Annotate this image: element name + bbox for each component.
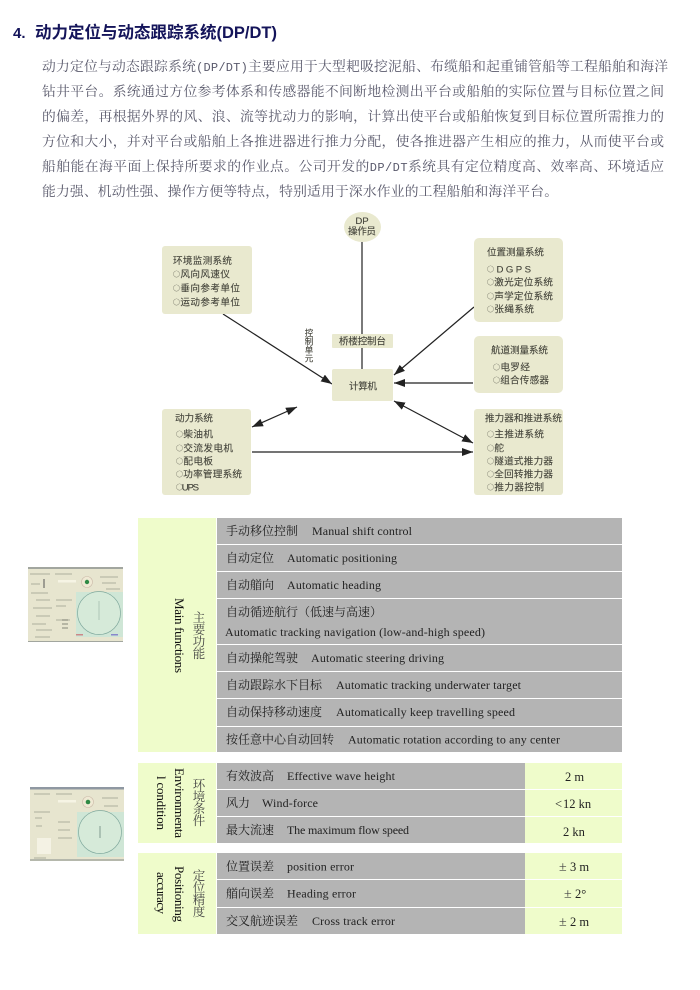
row: maximum flow speed [217, 817, 622, 843]
row: automatic steering driving [217, 645, 622, 671]
row: automatic tracking underwater target [217, 672, 622, 698]
panel: position measurement system: 位置测量系统 [487, 246, 544, 258]
row: automatic positioning: Automatic positioning [287, 551, 397, 565]
row: position error: 3 m [570, 860, 589, 874]
row: automatically keep travelling speed: 自动保持移动速度 [226, 704, 322, 719]
row: effective wave height: Effective wave height [287, 769, 396, 783]
table: environmental condition [138, 763, 622, 843]
row: automatic rotation around any center: Automatic rotation according to any center [348, 732, 560, 746]
panel: thruster and propulsion system: ○全回转推力器 [487, 468, 553, 480]
row: heading error: 艏向误差 [226, 886, 274, 900]
row: maximum flow speed: 最大流速 [226, 822, 274, 837]
row: heading error: Heading error [287, 886, 356, 900]
row: automatic heading: 自动艏向 [226, 577, 274, 592]
panel: thruster and propulsion system: ○主推进系统 [487, 428, 544, 440]
row: heading error: ± [564, 887, 572, 902]
row: automatic tracking navigation: 自动循迹航行（低速与高速） [226, 604, 382, 619]
side label: environmental condition: l condition [154, 776, 169, 830]
side label: positioning accuracy: 精 [193, 892, 206, 907]
screenshot: DP control screen 1 [28, 567, 123, 642]
arrow: environment monitoring to computer [223, 314, 332, 384]
row: cross track error [217, 908, 622, 934]
side label: main functions: 功 [193, 634, 205, 649]
panel: navigation measurement system: ○组合传感器 [493, 374, 549, 386]
row: position error [217, 853, 622, 879]
panel: position measurement system [474, 238, 563, 322]
side label: environmental condition: 环 [193, 778, 206, 792]
panel: power system [162, 409, 251, 495]
row: maximum flow speed: The maximum flow speed [287, 823, 409, 837]
panel: environment monitoring system [162, 246, 252, 314]
row: automatic tracking underwater target: Automatic tracking underwater target [336, 678, 522, 692]
panel: thruster and propulsion system: ○舵 [487, 442, 504, 454]
table: main functions [138, 518, 622, 752]
row: wind force: 风力 [226, 795, 250, 810]
row: wind force: Wind-force [262, 796, 318, 810]
row: automatic rotation around any center [217, 727, 622, 752]
row: wind force [217, 790, 622, 816]
side label: main functions: 能 [193, 646, 205, 661]
side label: environmental condition: 条 [193, 802, 206, 816]
panel: power system: ○功率管理系统 [176, 468, 242, 480]
row: wind force: < [555, 797, 562, 811]
row: cross track error: 交叉航迹误差 [226, 913, 298, 928]
label: control unit: 控 [305, 328, 314, 338]
panel: power system: 动力系统 [175, 412, 213, 424]
arrow: power system double arrow [252, 407, 297, 427]
intro paragraph [42, 58, 668, 200]
intro paragraph: 钻井平台。系统通过方位参考体系和传感器能不间断地检测出平台或船舶的实际位置与目标位置之间 [42, 83, 664, 99]
intro paragraph: 船舶能在海平面上保持所要求的作业点。公司开发的DP/DT系统具有定位精度高、效率高、环境适应 [42, 158, 664, 175]
row: position error: ± [559, 860, 567, 875]
side label: main functions: 要 [193, 623, 206, 637]
node: computer [332, 369, 393, 401]
table: positioning accuracy [138, 853, 622, 934]
panel: power system: ○UPS [176, 482, 199, 494]
row: automatic positioning: 自动定位 [226, 550, 274, 565]
intro paragraph: 方位和大小，并对平台或船舶上各推进器进行推力分配，使各推进器产生相应的推力，从而使平台或 [42, 133, 664, 150]
row: automatic heading: Automatic heading [287, 578, 381, 592]
label: control unit: 单 [305, 345, 314, 355]
row: position error: 位置误差 [226, 858, 274, 874]
row: manual shift control [217, 518, 622, 544]
panel: environment monitoring system: ○风向风速仪 [173, 268, 230, 280]
arrow: DP operator to bridge console and computer [361, 242, 363, 369]
panel: position measurement system: ○声学定位系统 [487, 290, 553, 302]
side label: positioning accuracy: 定 [193, 869, 206, 883]
row: automatic steering driving: Automatic steering driving [311, 651, 444, 665]
row: effective wave height: 2 m [565, 770, 584, 784]
title: 4. [13, 25, 26, 42]
label: control unit: 制 [305, 336, 313, 346]
row: cross track error: Cross track error [312, 914, 395, 928]
side label: main functions: Main functions [172, 598, 187, 673]
row: automatic positioning [217, 545, 622, 571]
row: automatic tracking underwater target: 自动跟踪水下目标 [226, 677, 323, 692]
node: DP operator [344, 212, 381, 242]
node: bridge console: 桥楼控制台 [339, 336, 386, 348]
panel: thruster and propulsion system [474, 409, 563, 495]
intro paragraph: 动力定位与动态跟踪系统(DP/DT)主要应用于大型耙吸挖泥船、布缆船和起重铺管船等工程船舶和海洋 [42, 58, 668, 75]
row: automatic heading [217, 572, 622, 598]
arrow: computer to thruster system [394, 401, 473, 443]
side label: environmental condition [138, 763, 216, 843]
screenshot: DP control screen 2 [30, 787, 124, 861]
arrow: power system to thruster system [252, 451, 473, 453]
panel: power system: ○配电板 [176, 456, 213, 468]
side label: environmental condition: 境 [193, 789, 205, 804]
panel: thruster and propulsion system: ○隧道式推力器 [487, 456, 553, 468]
row: effective wave height: 有效波高 [226, 768, 274, 783]
side label: positioning accuracy: Positioning [172, 866, 187, 922]
row: automatic tracking navigation: Automatic tracking navigation (low-and-high speed) [225, 625, 485, 639]
panel: position measurement system: ○ DGPS [487, 264, 531, 276]
arrow: navigation measurement to computer [394, 382, 473, 384]
node: bridge console [332, 334, 393, 348]
side label: main functions [138, 518, 216, 752]
row: wind force: 12 kn [563, 797, 592, 811]
node: DP operator: 操作员 [348, 226, 376, 238]
panel: environment monitoring system: ○垂向参考单位 [173, 282, 240, 294]
panel: position measurement system: ○张绳系统 [487, 304, 534, 316]
side label: positioning accuracy: accuracy [154, 872, 169, 914]
label: control unit: 元 [305, 354, 314, 364]
row: cross track error: ± [559, 915, 567, 930]
panel: thruster and propulsion system: ○推力器控制 [487, 482, 544, 494]
side label: environmental condition: Environmenta [172, 768, 187, 838]
row: automatic tracking navigation [217, 599, 622, 644]
panel: environment monitoring system: 环境监测系统 [173, 255, 232, 267]
side label: positioning accuracy: 度 [193, 904, 206, 919]
panel: navigation measurement system: ○电罗经 [493, 362, 530, 374]
panel: navigation measurement system [474, 336, 563, 393]
panel: environment monitoring system: ○运动参考单位 [173, 296, 240, 308]
row: automatic steering driving: 自动操舵驾驶 [226, 650, 298, 665]
row: automatically keep travelling speed: Automatically keep travelling speed [336, 705, 515, 719]
row: heading error: 2° [575, 887, 586, 901]
row: heading error [217, 880, 622, 907]
intro paragraph: 能力强、机动性强、操作方便等特点，特别适用于深水作业的工程船舶和海洋平台。 [42, 183, 558, 200]
panel: power system: ○交流发电机 [176, 442, 233, 454]
intro paragraph: 的偏差，再根据外界的风、浪、流等扰动力的影响，计算出使平台或船舶恢复到目标位置所需推力的 [42, 108, 664, 125]
side label: positioning accuracy: 位 [193, 881, 206, 895]
panel: navigation measurement system: 航道测量系统 [491, 344, 548, 356]
label: control unit [305, 328, 314, 364]
row: automatically keep travelling speed [217, 699, 622, 726]
row: cross track error: 2 m [570, 915, 589, 929]
panel: power system: ○柴油机 [176, 428, 213, 440]
row: manual shift control: 手动移位控制 [226, 523, 298, 538]
row: effective wave height [217, 763, 622, 789]
row: automatic rotation around any center: 按任意中心自动回转 [226, 732, 334, 746]
panel: thruster and propulsion system: 推力器和推进系统 [485, 412, 562, 424]
side label: positioning accuracy [138, 853, 216, 934]
node: DP operator: DP [355, 216, 369, 227]
row: maximum flow speed: 2 kn [563, 825, 586, 839]
system diagram [162, 212, 563, 495]
panel: position measurement system: ○激光定位系统 [487, 276, 553, 288]
arrow: position measurement to computer [394, 307, 474, 375]
row: manual shift control: Manual shift control [312, 524, 413, 538]
node: computer: 计算机 [349, 380, 377, 392]
side label: environmental condition: 件 [193, 813, 206, 828]
title: 动力定位与动态跟踪系统(DP/DT) [35, 22, 277, 42]
row: position error: position error [287, 860, 354, 874]
side label: main functions: 主 [193, 611, 205, 625]
